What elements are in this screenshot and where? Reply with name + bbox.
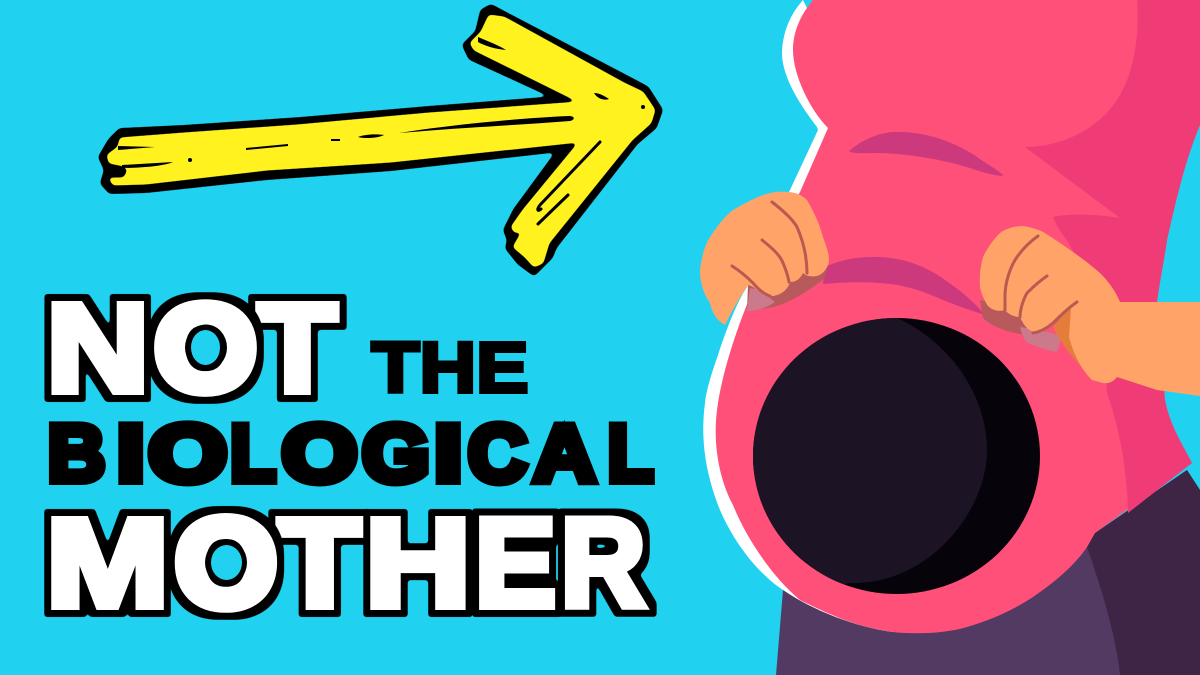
hand shape (700, 192, 829, 325)
letter O: O (155, 280, 256, 416)
trousers (776, 470, 1200, 675)
orange fold under wrist (1053, 305, 1092, 380)
letter B: B (48, 409, 106, 499)
finger lines (1005, 236, 1077, 333)
hand shadow light (1020, 327, 1062, 352)
O counter (191, 330, 220, 365)
arrow: yellow hand-drawn pointing right (100, 6, 661, 274)
letter C: C (468, 409, 527, 499)
letter A: A (533, 409, 596, 499)
hand and arm shape (980, 226, 1200, 396)
title: THE: THE (372, 329, 528, 408)
letter H: H (365, 494, 471, 633)
hole in belly (753, 318, 1040, 594)
right hand and arm (980, 226, 1200, 396)
letter L: L (230, 409, 276, 499)
trousers shaded side (1087, 470, 1200, 675)
letter O: O (149, 409, 227, 499)
letter I: I (434, 409, 463, 499)
O counter rim (205, 540, 247, 586)
letter N: N (46, 279, 149, 418)
title: MOTHER (46, 494, 645, 633)
letter E: E (475, 494, 556, 633)
letter G: G (362, 409, 429, 499)
letter I: I (116, 409, 145, 499)
arrow black outline (100, 6, 661, 274)
lower barb lines (538, 142, 600, 224)
letter O: O (282, 409, 357, 499)
darker side shading (1025, 0, 1200, 513)
hand shadow (980, 300, 1040, 336)
arrow yellow fill (107, 15, 655, 267)
letter M: M (46, 494, 169, 633)
hole dark crescent (753, 318, 1040, 594)
letter T: T (278, 494, 361, 633)
hand shadow light (747, 288, 775, 311)
O counter rim (185, 324, 227, 370)
lower fold crease (823, 257, 985, 315)
title: BIOLOGICAL (48, 409, 654, 499)
finger lines (732, 202, 807, 296)
belly crease (849, 132, 1003, 176)
left hand (700, 192, 829, 325)
letter L: L (608, 409, 654, 499)
pink torso (716, 0, 1200, 633)
letter R: R (561, 494, 645, 633)
arrow dots (188, 158, 192, 162)
hand shadow (747, 262, 828, 311)
O counter (211, 545, 242, 580)
title: NOT (46, 279, 337, 418)
letter O: O (176, 495, 276, 633)
arrow texture marks (118, 37, 609, 168)
letter T: T (258, 279, 337, 418)
illustration: pregnant body (700, 0, 1200, 675)
hole lighter centre (753, 318, 987, 584)
arrow tip dot (641, 105, 645, 109)
white outline of body (703, 0, 1000, 632)
